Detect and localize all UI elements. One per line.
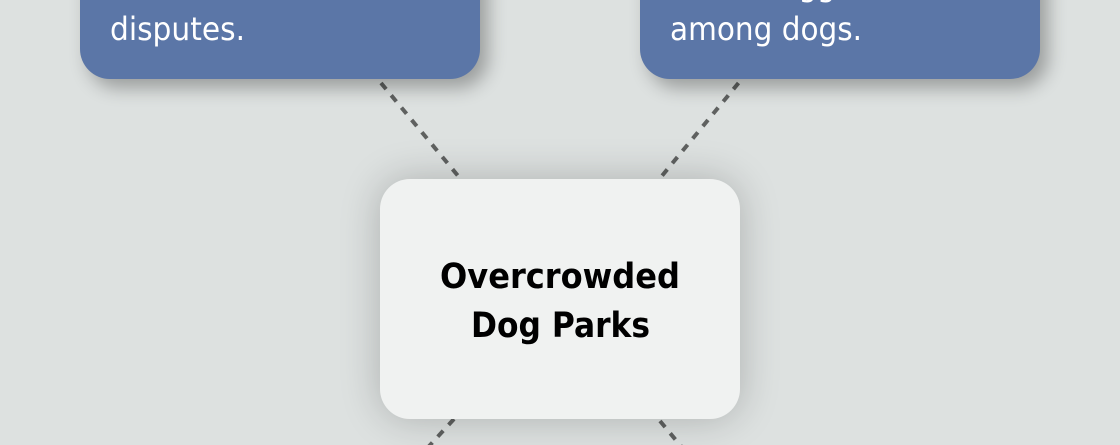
panel: left blue card <box>80 0 480 79</box>
text: left card: disputes. <box>110 10 245 48</box>
heading: central topic: Overcrowded <box>440 257 680 297</box>
heading: central topic <box>440 257 680 346</box>
panel: central topic card <box>380 179 740 419</box>
heading: central topic: Dog Parks <box>471 306 650 346</box>
text: right card: among dogs. <box>670 10 862 48</box>
text: right card <box>670 0 940 48</box>
panel: right blue card <box>640 0 1040 79</box>
